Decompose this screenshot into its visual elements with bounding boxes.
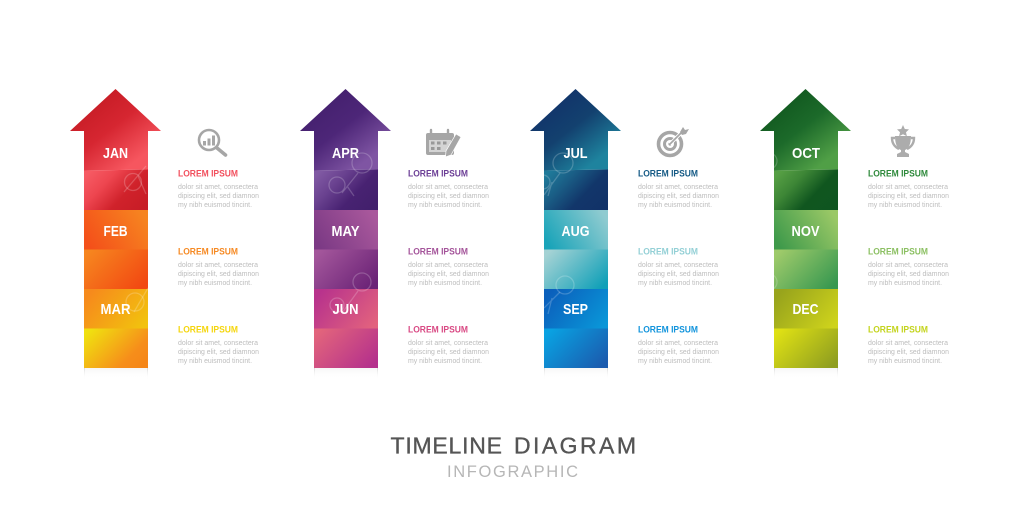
- text block: September: [638, 324, 719, 365]
- column: January to March: [70, 89, 259, 379]
- text block: January: dolor sit amet, consectera: [178, 182, 259, 191]
- title: [390, 432, 636, 458]
- text block: June: my nibh euismod tincint.: [408, 356, 482, 365]
- month label: AUG: AUG: [562, 223, 590, 240]
- text block: October: my nibh euismod tincint.: [868, 200, 942, 209]
- text block: November: my nibh euismod tincint.: [868, 278, 942, 287]
- month label: OCT: OCT: [792, 145, 820, 162]
- text block: May: [408, 246, 489, 287]
- text block: August: dolor sit amet, consectera: [638, 260, 719, 269]
- text block: April: my nibh euismod tincint.: [408, 200, 482, 209]
- text block: March: dolor sit amet, consectera: [178, 338, 259, 347]
- month label: SEP: SEP: [563, 301, 588, 318]
- text block: January: dipiscing elit, sed diamnon: [178, 191, 259, 200]
- arrow: purple to pink: [300, 89, 391, 379]
- title: DIAGRAM: [514, 432, 636, 458]
- text block: January: LOREM IPSUM: [178, 168, 238, 180]
- text block: April: LOREM IPSUM: [408, 168, 468, 180]
- text block: November: dipiscing elit, sed diamnon: [868, 269, 949, 278]
- text block: July: my nibh euismod tincint.: [638, 200, 712, 209]
- text block: February: dolor sit amet, consectera: [178, 260, 259, 269]
- text block: August: my nibh euismod tincint.: [638, 278, 712, 287]
- arrow: navy to blue: [530, 89, 621, 379]
- text block: February: LOREM IPSUM: [178, 246, 238, 258]
- text block: June: LOREM IPSUM: [408, 324, 468, 336]
- month label: MAY: MAY: [332, 223, 360, 240]
- text block: September: dolor sit amet, consectera: [638, 338, 719, 347]
- text block: February: dipiscing elit, sed diamnon: [178, 269, 259, 278]
- month label: NOV: NOV: [792, 223, 820, 240]
- column: October to December: [760, 89, 949, 379]
- text block: September: LOREM IPSUM: [638, 324, 698, 336]
- text block: December: LOREM IPSUM: [868, 324, 928, 336]
- text block: April: dipiscing elit, sed diamnon: [408, 191, 489, 200]
- text block: December: [868, 324, 949, 365]
- text block: August: LOREM IPSUM: [638, 246, 698, 258]
- month label: FEB: FEB: [104, 223, 128, 240]
- text block: March: LOREM IPSUM: [178, 324, 238, 336]
- icon: calendar and pencil: [426, 130, 461, 157]
- text block: December: my nibh euismod tincint.: [868, 356, 942, 365]
- text block: July: dolor sit amet, consectera: [638, 182, 719, 191]
- text block: August: [638, 246, 719, 287]
- text block: November: dolor sit amet, consectera: [868, 260, 949, 269]
- text block: June: dipiscing elit, sed diamnon: [408, 347, 489, 356]
- text block: April: [408, 168, 489, 209]
- icon: target with arrow: [658, 127, 689, 156]
- text block: November: LOREM IPSUM: [868, 246, 928, 258]
- text block: January: my nibh euismod tincint.: [178, 200, 252, 209]
- month label: JUN: JUN: [332, 301, 358, 318]
- arrow: dark green to lime: [760, 89, 851, 379]
- subtitle: INFOGRAPHIC: [447, 463, 578, 481]
- text block: October: dipiscing elit, sed diamnon: [868, 191, 949, 200]
- text block: February: [178, 246, 259, 287]
- title: TIMELINE: [390, 432, 502, 458]
- text block: May: dolor sit amet, consectera: [408, 260, 489, 269]
- text block: January: [178, 168, 259, 209]
- text block: November: [868, 246, 949, 287]
- text block: December: dolor sit amet, consectera: [868, 338, 949, 347]
- text block: December: dipiscing elit, sed diamnon: [868, 347, 949, 356]
- column: July to September: [530, 89, 719, 379]
- arrow: red to yellow: [70, 89, 161, 379]
- text block: May: my nibh euismod tincint.: [408, 278, 482, 287]
- text block: May: LOREM IPSUM: [408, 246, 468, 258]
- month label: MAR: MAR: [100, 301, 131, 318]
- text block: June: dolor sit amet, consectera: [408, 338, 489, 347]
- icon: trophy with star: [892, 125, 914, 157]
- text block: April: dolor sit amet, consectera: [408, 182, 489, 191]
- text block: May: dipiscing elit, sed diamnon: [408, 269, 489, 278]
- text block: March: [178, 324, 259, 365]
- month label: JAN: JAN: [103, 145, 128, 162]
- text block: August: dipiscing elit, sed diamnon: [638, 269, 719, 278]
- text block: March: my nibh euismod tincint.: [178, 356, 252, 365]
- text block: March: dipiscing elit, sed diamnon: [178, 347, 259, 356]
- month label: APR: APR: [332, 145, 359, 162]
- text block: October: [868, 168, 949, 209]
- month label: JUL: JUL: [564, 145, 588, 162]
- text block: July: LOREM IPSUM: [638, 168, 698, 180]
- month label: DEC: DEC: [792, 301, 819, 318]
- text block: October: dolor sit amet, consectera: [868, 182, 949, 191]
- text block: February: my nibh euismod tincint.: [178, 278, 252, 287]
- text block: June: [408, 324, 489, 365]
- icon: magnifier with bar chart: [199, 130, 226, 155]
- text block: July: dipiscing elit, sed diamnon: [638, 191, 719, 200]
- text block: September: my nibh euismod tincint.: [638, 356, 712, 365]
- column: April to June: [300, 89, 489, 379]
- text block: July: [638, 168, 719, 209]
- text block: September: dipiscing elit, sed diamnon: [638, 347, 719, 356]
- text block: October: LOREM IPSUM: [868, 168, 928, 180]
